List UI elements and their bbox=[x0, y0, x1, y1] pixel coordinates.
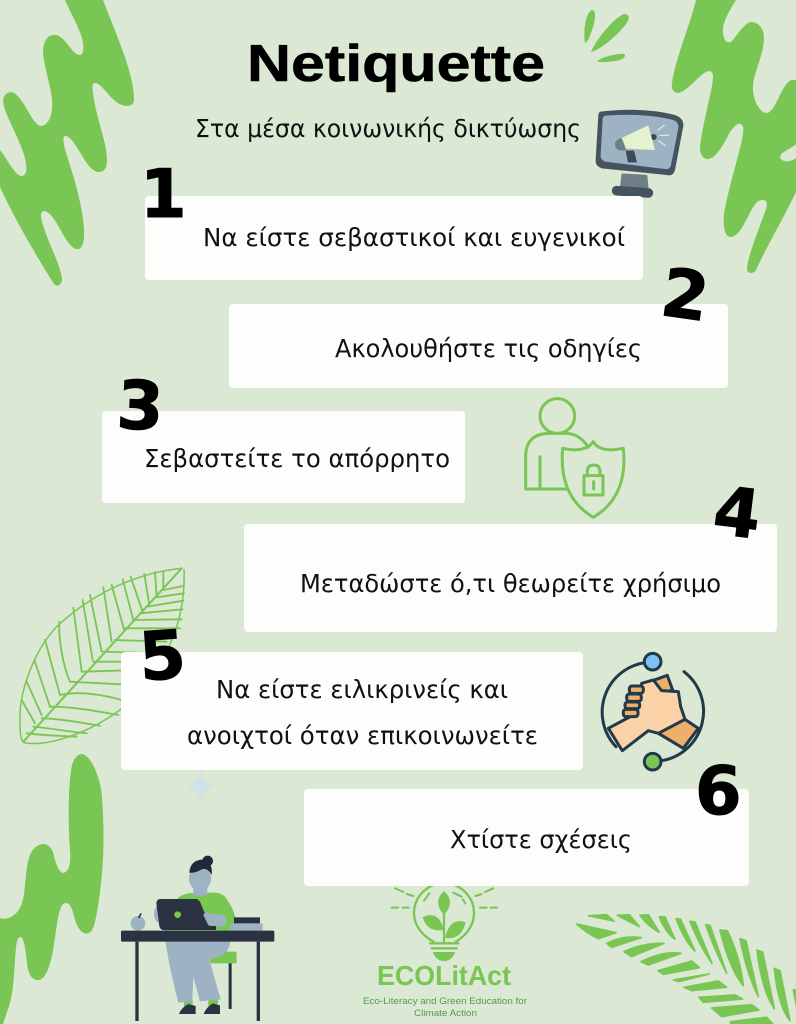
text: rule 5: ανοιχτοί όταν επικοινωνείτε bbox=[187, 721, 538, 750]
decorative blob: top left bbox=[0, 0, 134, 286]
decorative palm leaf bbox=[577, 915, 796, 1024]
text: rule 4: Μεταδώστε ό,τι θεωρείτε χρήσιμο bbox=[300, 569, 721, 598]
text: rule 3: Σεβαστείτε το απόρρητο bbox=[144, 444, 450, 473]
card 4 bbox=[244, 524, 777, 632]
number 6: 6 bbox=[695, 752, 742, 830]
number 3: 3 bbox=[115, 366, 166, 446]
decorative blob: top right bbox=[672, 0, 796, 273]
text: rule 6: Χτίστε σχέσεις bbox=[450, 825, 632, 854]
icon: monitor with megaphone bbox=[596, 110, 683, 193]
decorative sprouts bbox=[584, 10, 629, 62]
text: rule 5: Να είστε ειλικρινείς και bbox=[216, 675, 508, 704]
number 4: 4 bbox=[709, 471, 765, 555]
decorative blob: bottom left bbox=[0, 754, 104, 1024]
text: rule 1: Να είστε σεβαστικοί και ευγενικοί bbox=[203, 223, 626, 252]
text: rule 2: Ακολουθήστε τις οδηγίες bbox=[335, 334, 642, 363]
logo: ECOLitAct: Climate Action bbox=[414, 1008, 477, 1019]
logo: ECOLitAct: ECOLitAct bbox=[377, 960, 511, 991]
card 5 bbox=[121, 652, 583, 770]
number 1: 1 bbox=[140, 155, 187, 233]
icon: user with shield bbox=[526, 399, 624, 517]
subtitle: Στα μέσα κοινωνικής δικτύωσης bbox=[195, 114, 581, 143]
decorative leaf outline bbox=[20, 568, 184, 743]
decorative sparkle bbox=[187, 770, 215, 803]
logo: ECOLitAct bbox=[363, 883, 527, 1019]
card 1 bbox=[145, 196, 643, 280]
logo: ECOLitAct: Eco-Literacy and Green Education for bbox=[363, 996, 527, 1007]
icon: handshake bbox=[602, 653, 704, 770]
text: rule 5 bbox=[187, 675, 538, 750]
card 3 bbox=[102, 411, 465, 503]
number 2: 2 bbox=[657, 253, 714, 337]
card 2 bbox=[229, 304, 728, 388]
illustration: person at desk with laptop bbox=[121, 856, 274, 1021]
card 6 bbox=[304, 789, 749, 886]
number 5: 5 bbox=[136, 615, 188, 696]
title: Netiquette bbox=[247, 35, 545, 93]
